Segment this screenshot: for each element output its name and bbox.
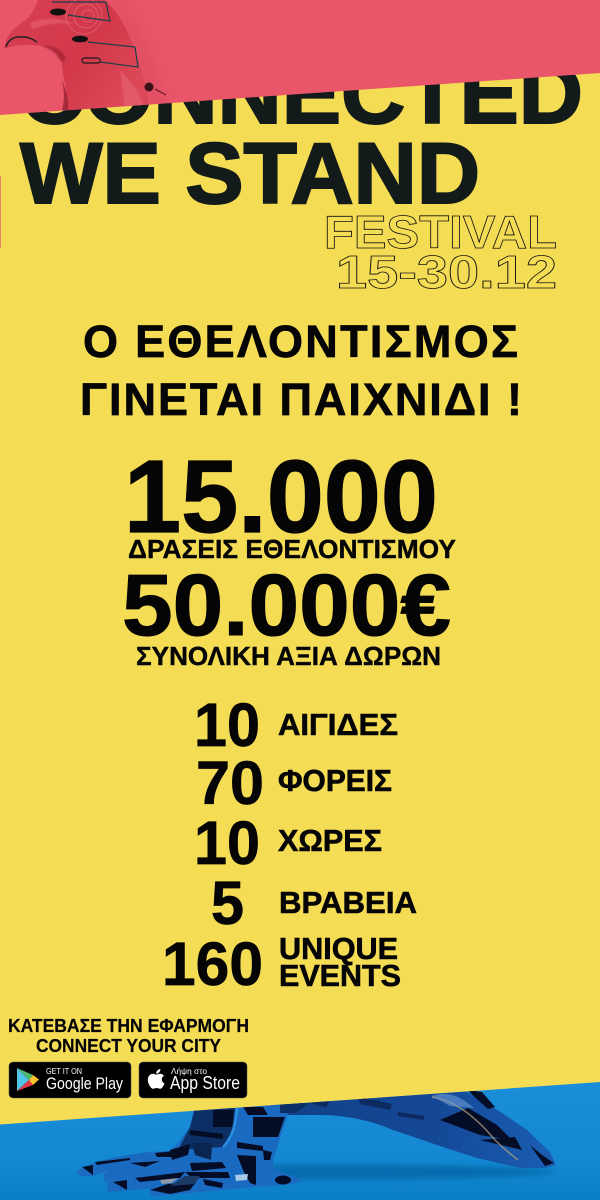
stat: 50.000 euro prizes: 50.000€ [122,557,451,654]
stat: 50.000 euro prizes: ΣΥΝΟΛΙΚΗ ΑΞΙΑ ΔΩΡΩΝ [136,641,441,671]
stat: 10 countries: 10 [194,809,260,877]
blue bottom band [0,1082,600,1200]
badge: app store: App Store [170,1073,240,1093]
leg and toes [76,1100,302,1197]
app download text: ΚΑΤΕΒΑΣΕ ΤΗΝ ΕΦΑΡΜΟΓΗ [8,1016,249,1036]
reflections [223,1108,237,1147]
headline: Ο ΕΘΕΛΟΝΤΙΣΜΟΣ [83,316,518,367]
badge: app store [139,1062,247,1098]
dark patches [82,1090,554,1194]
badge: google play: GET IT ON [46,1067,82,1076]
stat: 15.000 actions: ΔΡΑΣΕΙΣ ΕΘΕΛΟΝΤΙΣΜΟΥ [128,534,456,564]
icon: play triangle [17,1068,39,1091]
main title: WE STAND [20,126,480,222]
illustration: blue bird foot and tail [76,1085,556,1197]
stat: 5 awards: ΒΡΑΒΕΙΑ [279,885,417,920]
main title [20,46,583,222]
stat: 10 countries [194,809,382,877]
stat: 5 awards [211,869,417,937]
badge: app store: Λήψη στο [171,1067,208,1076]
stat: 10 countries: ΧΩΡΕΣ [278,823,382,858]
stat: 70 organisations: ΦΟΡΕΙΣ [278,763,392,798]
headline [80,316,522,425]
badge: google play [9,1062,131,1098]
tail marks [440,1108,512,1140]
stat: 70 organisations [196,749,392,817]
stat: 10 sectors [194,691,398,759]
app download text: CONNECT YOUR CITY [36,1036,221,1056]
headline: ΓΙΝΕΤΑΙ ΠΑΙΧΝΙΔΙ ! [80,374,522,425]
app download text [8,1016,249,1056]
stat: 160 unique events: 160 [162,930,263,998]
stat: 15.000 actions: 15.000 [124,439,438,554]
stat list [162,691,417,998]
illustration: red bird head [4,0,166,110]
festival label: FESTIVAL [324,206,557,258]
tail [270,1092,556,1168]
main title: CONNECTED [20,46,583,142]
stat: 5 awards: 5 [211,869,244,937]
eye pattern [66,0,102,34]
stat: 10 sectors: ΑΙΓΙΔΕΣ [278,707,398,742]
red top band [0,0,600,115]
stat: 160 unique events [162,930,401,998]
icon: apple [148,1069,165,1089]
stat: 70 organisations: 70 [196,749,264,817]
festival label: 15-30.12 [336,246,557,298]
stat: 160 unique events: EVENTS [279,958,401,993]
festival label [324,206,557,298]
dark line marks [6,2,166,95]
stat: 10 sectors: 10 [194,691,260,759]
badge: google play: Google Play [46,1074,123,1093]
edge mark [0,176,1,248]
stat: 160 unique events: UNIQUE [279,931,398,966]
